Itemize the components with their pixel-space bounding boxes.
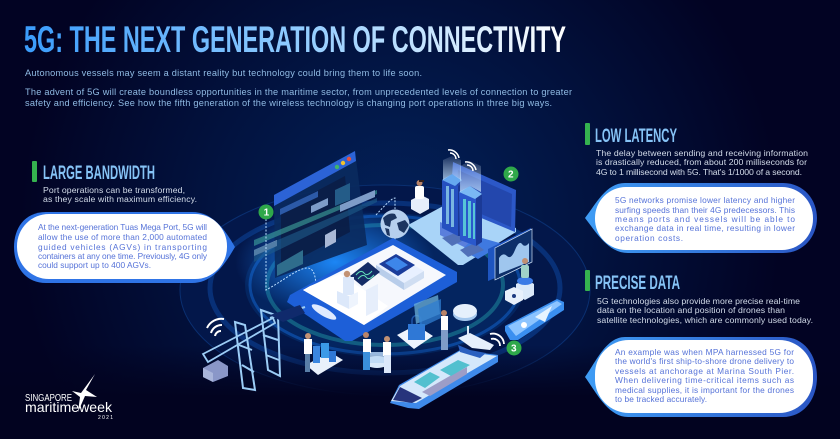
intro text: The advent of 5G will create boundless opportunities in the maritime sector, from unprecedented levels of connection to greater bbox=[25, 87, 572, 97]
crane jib block bbox=[270, 305, 305, 322]
logo: Singapore Maritime Week 2021 bbox=[25, 374, 113, 421]
padlock on tile bbox=[397, 316, 433, 349]
description: Port operations can be transformed, bbox=[43, 185, 185, 195]
wifi icon B bbox=[465, 162, 476, 171]
ship bbox=[390, 326, 498, 409]
dashed link globe to phone bbox=[394, 238, 396, 246]
intro text bbox=[25, 68, 572, 108]
callout bubble: An example was when MPA harnessed 5G for bbox=[615, 347, 794, 357]
data sheets with woman bbox=[414, 295, 448, 350]
processor chip bbox=[376, 254, 424, 290]
dashed link to globe bbox=[376, 198, 395, 215]
panel: low latency bbox=[585, 123, 817, 253]
panel: precise data bbox=[585, 270, 817, 417]
wifi icon ship bbox=[490, 334, 504, 346]
two people at table bbox=[363, 332, 391, 373]
description: satellite technologies, which are commonly used today. bbox=[597, 315, 813, 325]
marker 3: 3 bbox=[511, 344, 517, 354]
person with dna panel bbox=[337, 262, 380, 316]
description bbox=[596, 148, 808, 177]
callout bubble: At the next-generation Tuas Mega Port, 5G will bbox=[38, 222, 207, 232]
description: as they scale with maximum efficiency. bbox=[43, 194, 197, 204]
logo: Singapore Maritime Week 2021: SINGAPORE bbox=[25, 393, 72, 404]
description bbox=[43, 185, 197, 204]
logo: Singapore Maritime Week 2021: maritimeweek bbox=[25, 399, 113, 415]
green accent bar bbox=[585, 270, 590, 291]
central isometric illustration bbox=[0, 150, 840, 439]
callout bubble: vessels at anchorage at Marina South Pier. bbox=[615, 366, 794, 376]
description: is drastically reduced, from about 200 milliseconds for bbox=[596, 157, 807, 167]
callout bubble bbox=[585, 183, 817, 253]
marker 2: 2 bbox=[508, 170, 514, 180]
marker 1 with dashed link bbox=[258, 204, 316, 300]
chart monitor with person bbox=[488, 228, 534, 300]
person with blue blocks bbox=[304, 333, 343, 375]
callout bubble: to be tracked accurately. bbox=[615, 394, 707, 404]
logo: Singapore Maritime Week 2021: 2021 bbox=[98, 415, 113, 421]
heading: LARGE BANDWIDTH bbox=[43, 163, 155, 184]
green accent bar bbox=[32, 161, 37, 182]
marker 3 bbox=[506, 340, 522, 356]
callout bubble: operation costs. bbox=[615, 233, 683, 243]
callout bubble: containers at any one time. Previously, 4G only bbox=[38, 251, 208, 261]
heading: LOW LATENCY bbox=[595, 126, 677, 147]
callout bubble: means ports and vessels will be able to bbox=[615, 214, 795, 224]
description: 4G to 1 millisecond with 5G. That's 1/1000 of a second. bbox=[596, 167, 802, 177]
callout bubble: When delivering time-critical items such as bbox=[615, 375, 794, 385]
wifi icon left bbox=[207, 319, 224, 336]
description: data on the location and position of drones than bbox=[597, 305, 785, 315]
intro text: safety and efficiency. See how the fifth generation of the wireless technology is changing port operations in three big ways. bbox=[25, 98, 552, 108]
intro text: Autonomous vessels may seem a distant reality but technology could bring them to life soon. bbox=[25, 68, 422, 78]
server tower B bbox=[459, 161, 482, 246]
callout bubble: 5G networks promise lower latency and higher bbox=[615, 195, 795, 205]
callout bubble: surfing speeds than their 4G predecessors. This bbox=[615, 205, 795, 215]
callout bubble: could support up to 400 AGVs. bbox=[38, 260, 151, 270]
marker 1 with dashed link: 1 bbox=[264, 208, 270, 218]
description bbox=[597, 296, 813, 325]
navigation phone bbox=[505, 299, 564, 340]
platform rings bbox=[0, 185, 840, 439]
container under crane bbox=[203, 360, 228, 382]
callout bubble: guided vehicles (AGVs) in transporting bbox=[38, 242, 207, 252]
callout bubble: the world's first ship-to-shore drone delivery to bbox=[615, 356, 794, 366]
heading: PRECISE DATA bbox=[595, 273, 680, 294]
callout bubble: allow the use of more than 2,000 automated bbox=[38, 232, 207, 242]
panel: large bandwidth bbox=[14, 161, 235, 283]
star mark bbox=[72, 374, 97, 412]
marker 2 bbox=[504, 166, 518, 182]
callout bubble bbox=[14, 212, 235, 283]
small cube node bbox=[505, 287, 523, 305]
round pad bbox=[453, 304, 477, 321]
callout bubble bbox=[585, 337, 817, 417]
browser window panel bbox=[254, 151, 377, 278]
person seated on cube bbox=[411, 180, 429, 214]
callout bubble: medical supplies, it is important for the drones bbox=[615, 385, 794, 395]
crane bbox=[203, 305, 305, 390]
green accent bar bbox=[585, 123, 590, 145]
central phone bbox=[287, 238, 457, 341]
server tower A bbox=[442, 156, 462, 236]
wifi icon A bbox=[448, 150, 459, 159]
description: The delay between sending and receiving information bbox=[596, 148, 808, 158]
callout bubble: exchange data in real time, resulting in lower bbox=[615, 223, 795, 233]
description: 5G technologies also provide more precise real-time bbox=[597, 296, 800, 306]
laptop with server towers bbox=[408, 150, 516, 265]
globe bbox=[380, 210, 410, 238]
